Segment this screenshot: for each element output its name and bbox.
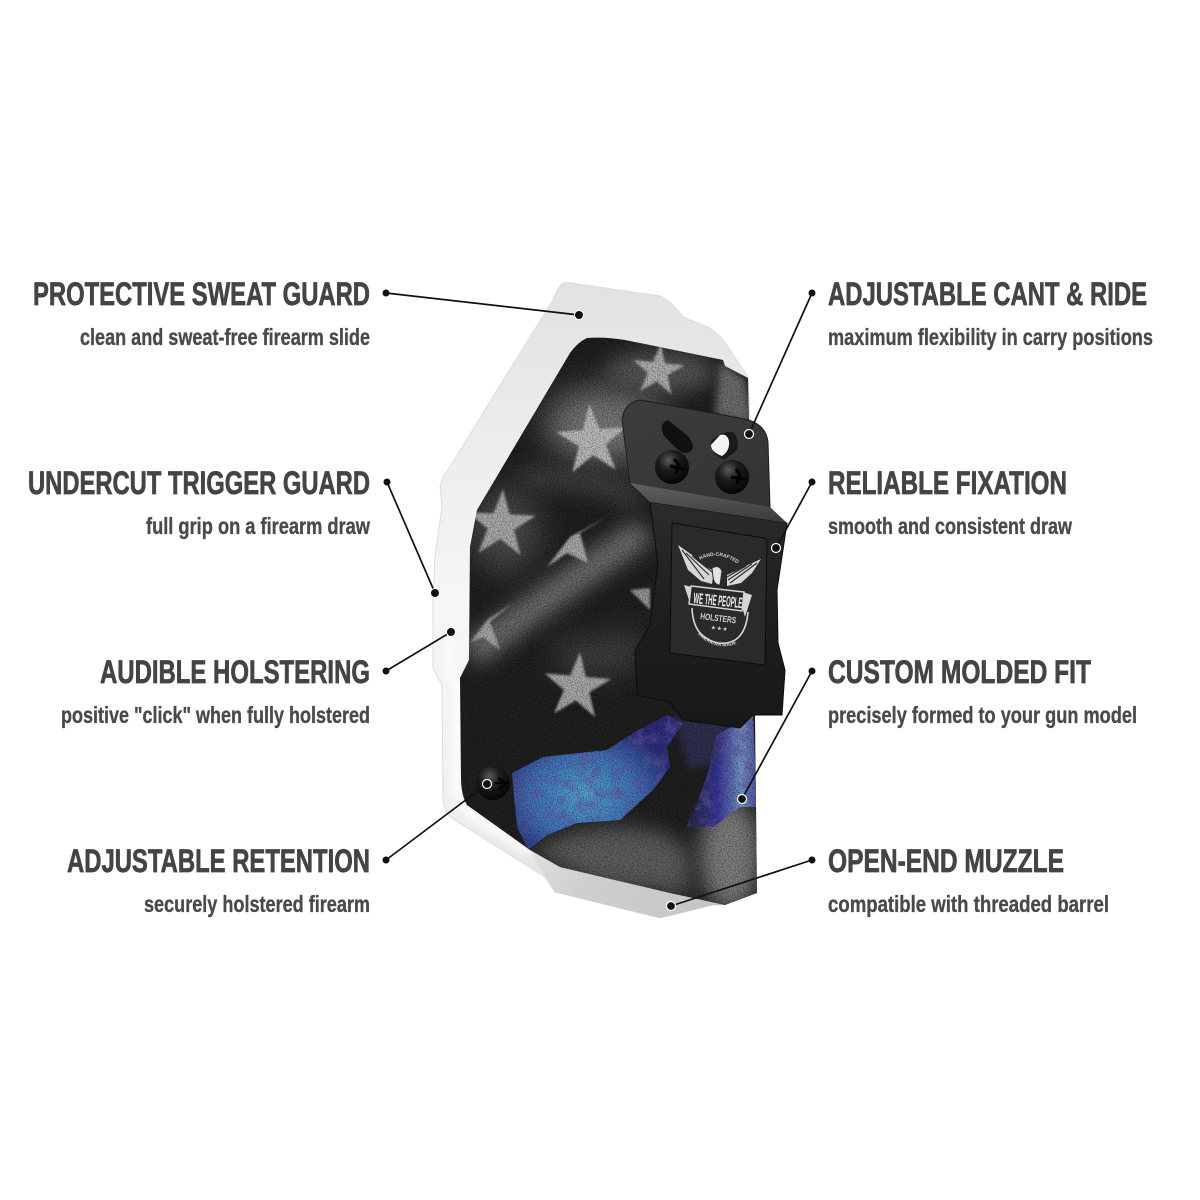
american made text: AMERICAN MADE [698,632,736,646]
label: protective sweat guard: clean and sweat-free firearm slide [80,324,370,350]
belt clip [622,400,788,728]
label: undercut trigger guard [28,465,370,539]
connector: audible holstering [382,628,456,674]
connector: adjustable cant and ride [744,290,816,438]
connector: reliable fixation [772,478,816,552]
hand-crafted text: HAND-CRAFTED [698,552,739,563]
printed flag body [460,338,757,905]
clip ledge [630,483,787,523]
label: protective sweat guard: PROTECTIVE SWEAT GUARD [33,276,370,312]
label: adjustable retention: securely holstered firearm [144,891,370,917]
flag folds [470,350,760,910]
banner [689,586,744,611]
label: reliable fixation: RELIABLE FIXATION [828,465,1067,501]
label: reliable fixation [828,465,1072,539]
connector: custom molded fit [738,668,816,804]
label: reliable fixation: smooth and consistent draw [828,513,1072,539]
violet haze over fold [672,716,730,770]
connector: adjustable retention [382,780,492,864]
white see-through hole [711,435,729,456]
label: audible holstering [61,654,370,728]
connector: undercut trigger guard [384,478,440,598]
blue stripe left [512,715,683,850]
badge stars: ★ ★ ★ [711,625,728,633]
holsters text: HOLSTERS [700,611,737,625]
label: open-end muzzle: OPEN-END MUZZLE [828,843,1064,879]
label plate [670,523,767,665]
blue stripe right [686,715,757,827]
eagle wings [678,545,761,586]
label: audible holstering: AUDIBLE HOLSTERING [100,654,370,690]
connector: protective sweat guard [382,290,584,320]
round hole [711,432,738,460]
white sweat guard shell [433,283,750,918]
eagle head [712,567,722,585]
blue mottling [512,715,756,849]
surface grain dark [460,338,757,905]
banner tails [684,585,752,617]
wing feathers [682,550,757,583]
holster illustration [432,282,788,918]
brand logo: WE THE PEOPLE [693,590,743,612]
label: undercut trigger guard: full grip on a firearm draw [146,513,370,539]
screw right [715,460,749,494]
screw left [655,450,689,484]
label: audible holstering: positive "click" when fully holstered [61,702,370,728]
connector: open-end muzzle [666,856,816,910]
label: adjustable retention [67,843,370,917]
label: adjustable cant and ride [828,276,1153,350]
label: custom molded fit [828,654,1137,728]
retention screw [476,766,510,800]
infographic canvas [29,282,1152,918]
slotted hole [662,420,693,453]
body base [460,338,757,905]
label: protective sweat guard [33,276,370,350]
flag stars [465,341,686,718]
badge ring [692,608,748,643]
shell highlight [450,640,530,853]
clip lower body [635,502,787,728]
surface grain light [460,338,757,904]
brand logo [678,545,761,646]
clip upper plate [622,400,770,507]
label: custom molded fit: CUSTOM MOLDED FIT [828,654,1091,690]
label: open-end muzzle: compatible with threaded barrel [828,891,1109,917]
label: open-end muzzle [828,843,1109,917]
label: adjustable retention: ADJUSTABLE RETENTION [67,843,370,879]
label: undercut trigger guard: UNDERCUT TRIGGER GUARD [28,465,370,501]
shell bottom shaded edge [530,850,725,918]
